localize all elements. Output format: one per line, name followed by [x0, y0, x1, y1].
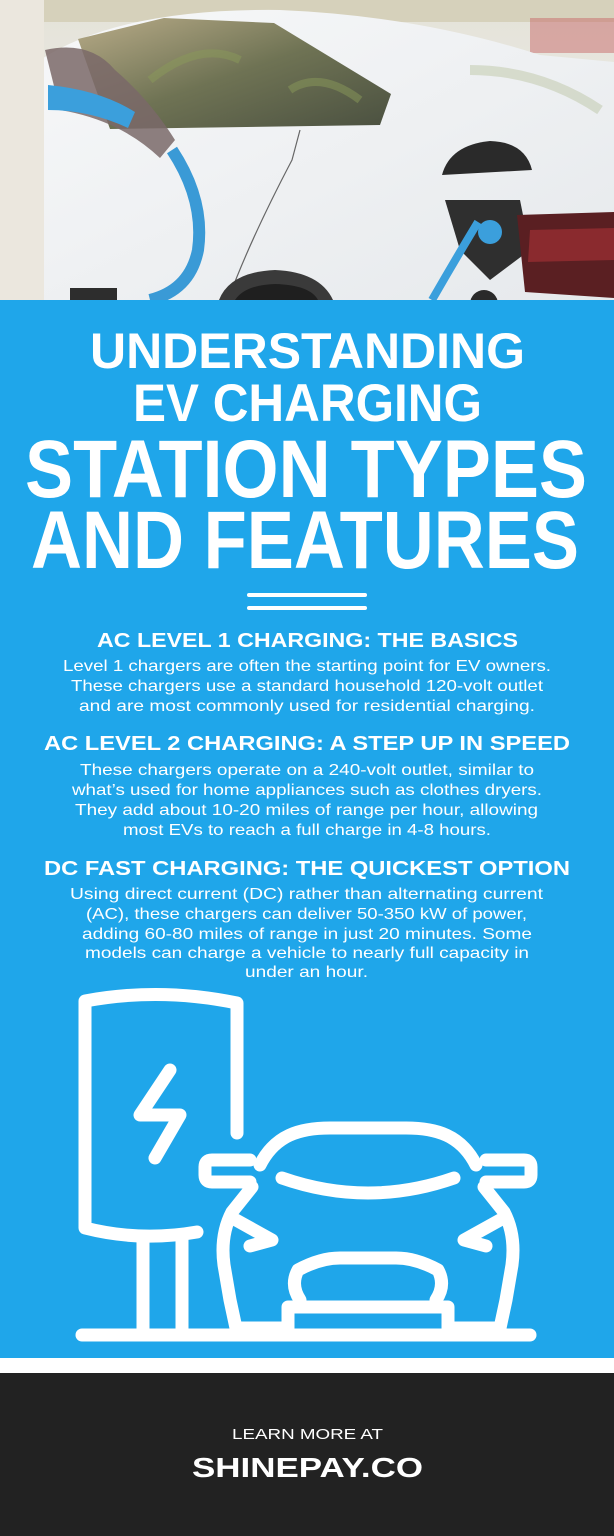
- blue panel background: [0, 300, 614, 1358]
- section: DC fast: Using direct current (DC) rather than alternating current: [70, 886, 544, 903]
- white strip: [0, 1358, 614, 1373]
- section: AC level 2: They add about 10-20 miles of range per hour, allowing: [75, 802, 538, 819]
- title: UNDERSTANDING: [90, 323, 525, 379]
- section: DC fast: models can charge a vehicle to nearly full capacity in: [85, 945, 529, 962]
- icon: charging station and car: [82, 994, 531, 1335]
- section: AC level 1: and are most commonly used for residential charging.: [79, 698, 535, 715]
- section: AC level 2: what’s used for home appliances such as clothes dryers.: [71, 782, 542, 799]
- section: DC fast: adding 60-80 miles of range in just 20 minutes. Some: [82, 926, 532, 943]
- section: DC fast: under an hour.: [245, 964, 368, 981]
- footer: [0, 1373, 614, 1536]
- footer: SHINEPAY.CO: [192, 1452, 423, 1483]
- footer: LEARN MORE AT: [232, 1426, 383, 1443]
- icon: car: [205, 1128, 531, 1328]
- section: AC level 1: [63, 630, 551, 715]
- title: [25, 323, 587, 586]
- section: DC fast: [44, 858, 570, 981]
- section: DC fast: (AC), these chargers can deliver 50-350 kW of power,: [86, 906, 527, 923]
- photo: EV charging: [0, 0, 614, 318]
- title: EV CHARGING: [133, 374, 482, 433]
- section: AC level 1: AC LEVEL 1 CHARGING: THE BASICS: [97, 630, 518, 652]
- section: AC level 2: AC LEVEL 2 CHARGING: A STEP UP IN SPEED: [44, 733, 570, 755]
- section: AC level 1: Level 1 chargers are often the starting point for EV owners.: [63, 658, 551, 675]
- icon: charger: [85, 994, 237, 1333]
- section: AC level 2: most EVs to reach a full charge in 4-8 hours.: [123, 822, 491, 839]
- section: AC level 2: These chargers operate on a 240-volt outlet, similar to: [80, 762, 534, 779]
- section: AC level 2: [44, 733, 570, 839]
- section: AC level 1: These chargers use a standard household 120-volt outlet: [71, 678, 544, 695]
- section: DC fast: DC FAST CHARGING: THE QUICKEST OPTION: [44, 858, 570, 880]
